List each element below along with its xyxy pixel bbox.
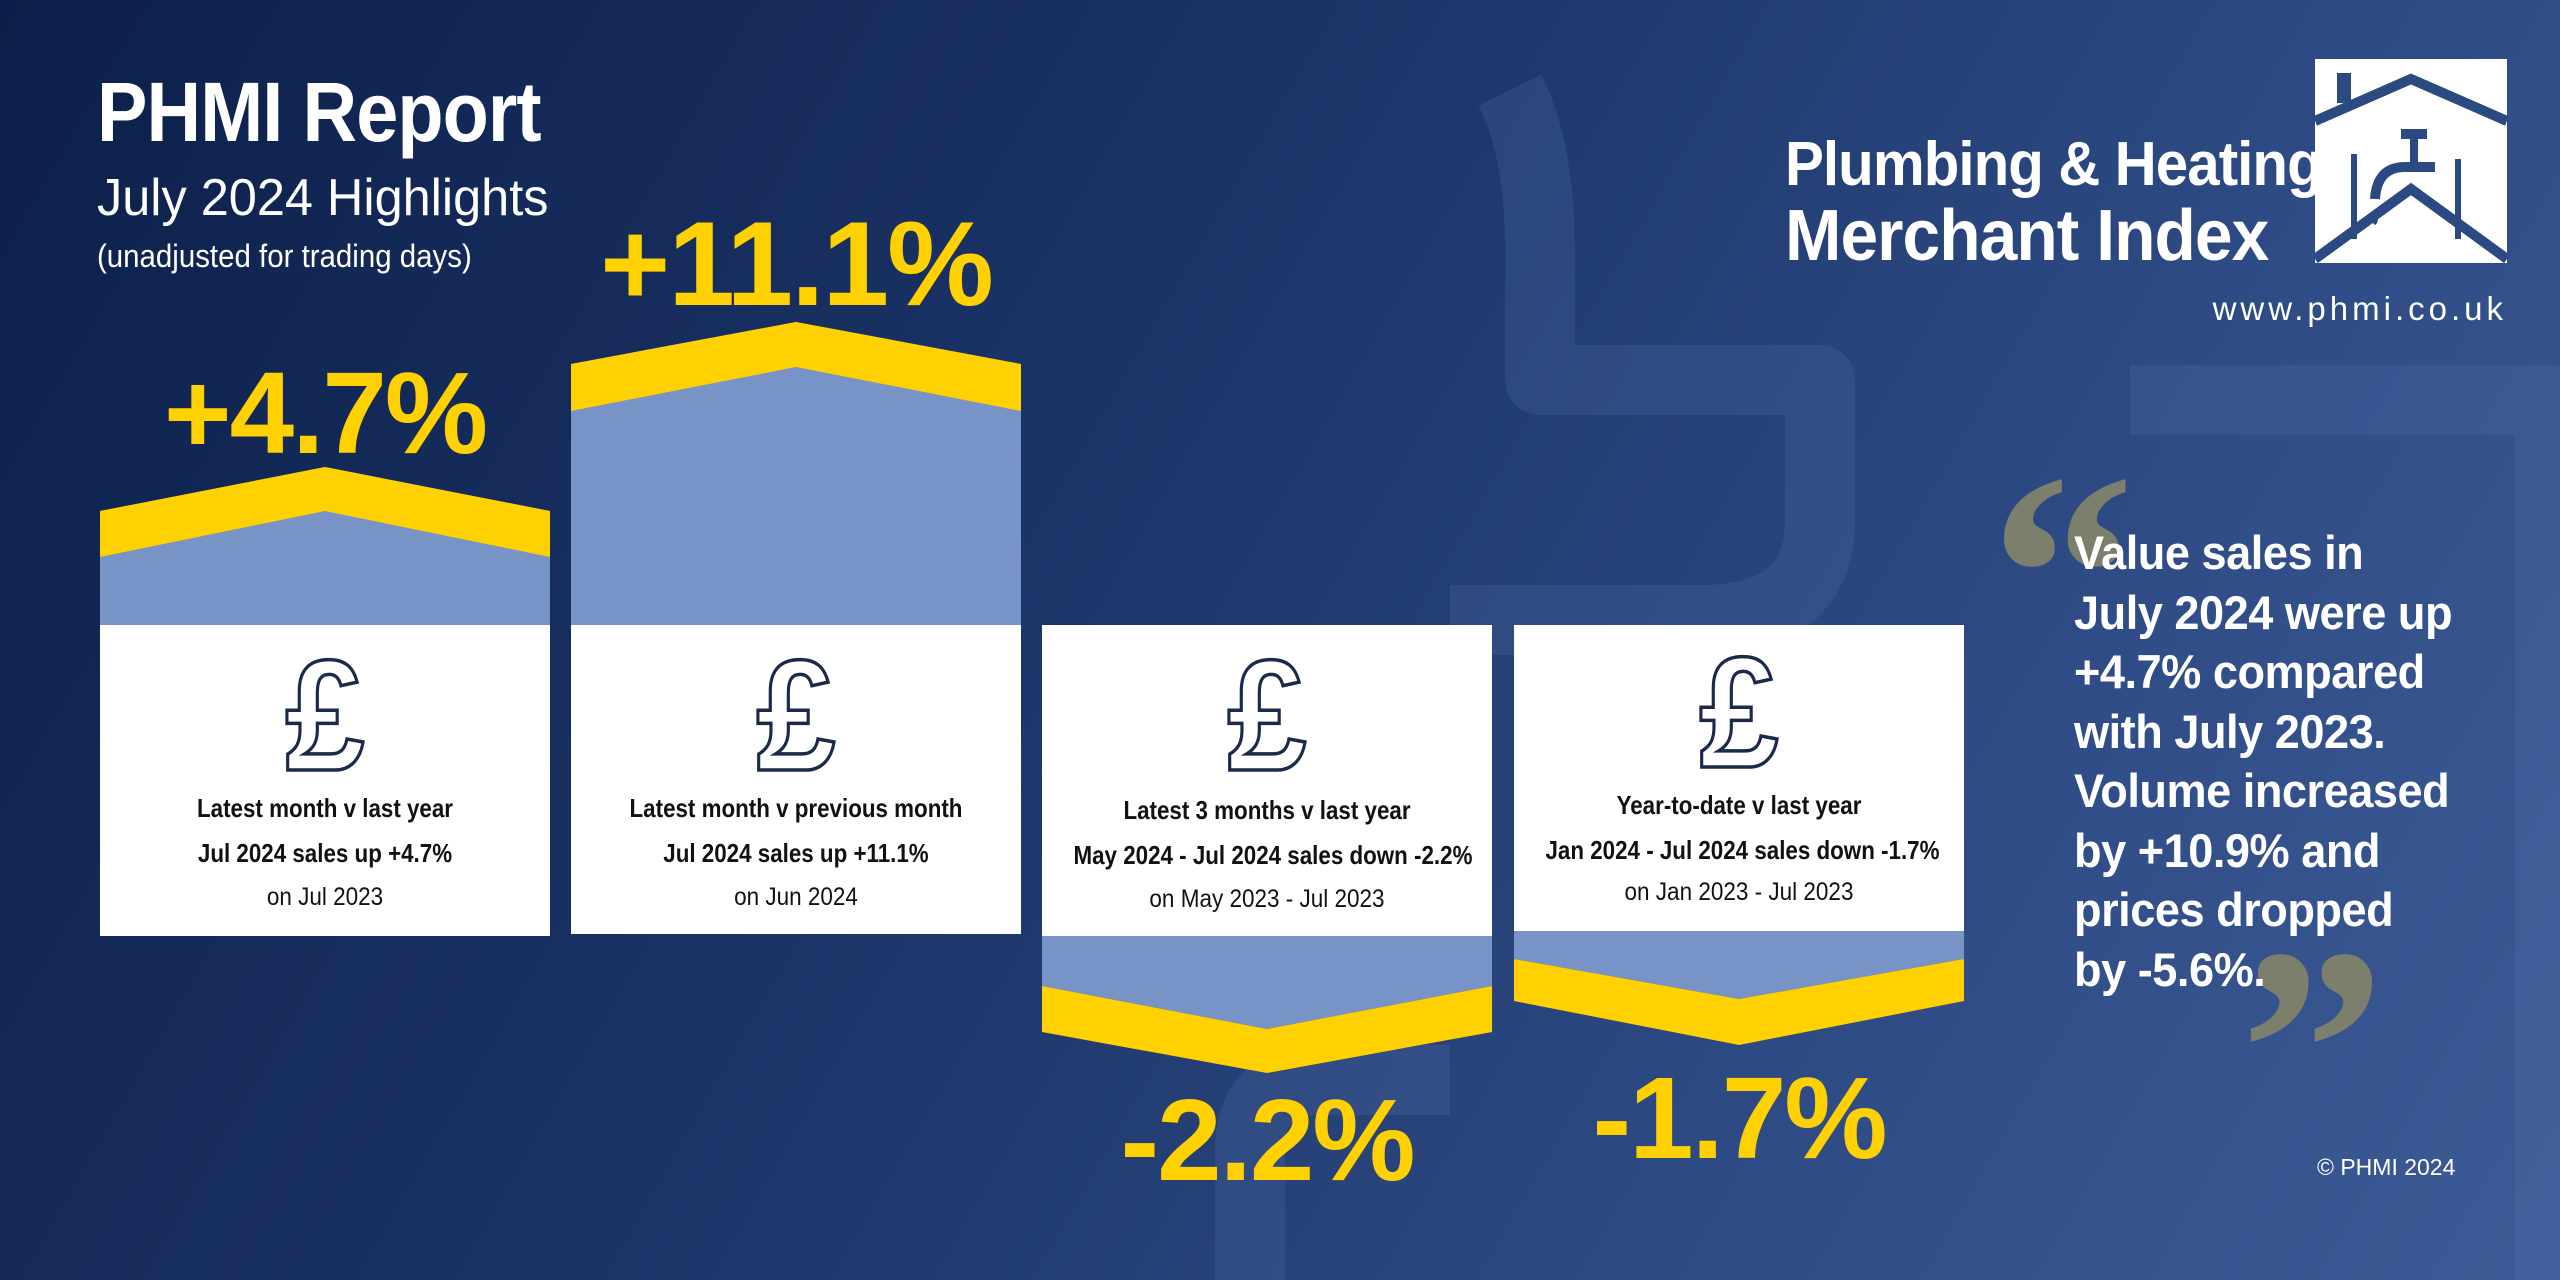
card 1: Jul 2024 sales up +4.7% [198,838,452,868]
card 2 chevron [571,322,1021,625]
card 2: Latest month v previous month [630,793,962,823]
logo icon [2315,59,2507,263]
copyright: © PHMI 2024 [2317,1154,2455,1180]
card 4: £ [1699,625,1779,801]
quote marks: “ [1990,414,2135,735]
logo text: Plumbing & Heating [1785,130,2322,199]
card 4 chevron [1514,931,1964,1045]
logo text [1785,130,2322,276]
card 3: on May 2023 - Jul 2023 [1149,885,1385,913]
card 4: on Jan 2023 - Jul 2023 [1625,878,1853,906]
card 3 chevron [1042,936,1492,1073]
card 4 [1514,625,1964,931]
quote text: Value sales in [2074,526,2363,579]
card 2: £ [756,628,836,804]
value 1: +4.7% [164,348,486,478]
text: ” [2240,889,2385,1210]
quote text: July 2024 were up [2074,586,2452,638]
quote text [2074,526,2452,996]
quote text: with July 2023. [2074,704,2385,758]
card 3: May 2024 - Jul 2024 sales down -2.2% [1074,840,1472,870]
logo text: Merchant Index [1785,196,2268,276]
value 3: -2.2% [1120,1075,1414,1205]
card 3: Latest 3 months v last year [1123,795,1411,825]
card 4: Year-to-date v last year [1617,790,1861,820]
card 2: Jul 2024 sales up +11.1% [663,838,929,868]
card 3: £ [1227,628,1307,804]
card 3 [1042,625,1492,936]
quote text: by +10.9% and [2074,824,2380,876]
card 1 chevron [100,467,550,625]
card 2: on Jun 2024 [734,883,858,911]
card 1 [100,625,550,936]
subtitle: July 2024 Highlights [97,169,548,227]
card 4: Jan 2024 - Jul 2024 sales down -1.7% [1546,835,1939,865]
website: www.phmi.co.uk [2213,290,2507,327]
card 1: on Jul 2023 [267,883,383,911]
quote text: by -5.6%. [2074,942,2265,996]
title: PHMI Report [97,65,541,159]
quote text: Volume increased [2074,764,2449,817]
quote text: prices dropped [2074,883,2393,936]
quote text: +4.7% compared [2074,645,2425,698]
card 1 text: Latest month v last year [197,793,453,823]
note: (unadjusted for trading days) [97,238,472,274]
value 2: +11.1% [600,197,992,331]
icon: pound: £ [285,628,365,804]
card 2 [571,625,1021,934]
value 4: -1.7% [1592,1053,1886,1183]
